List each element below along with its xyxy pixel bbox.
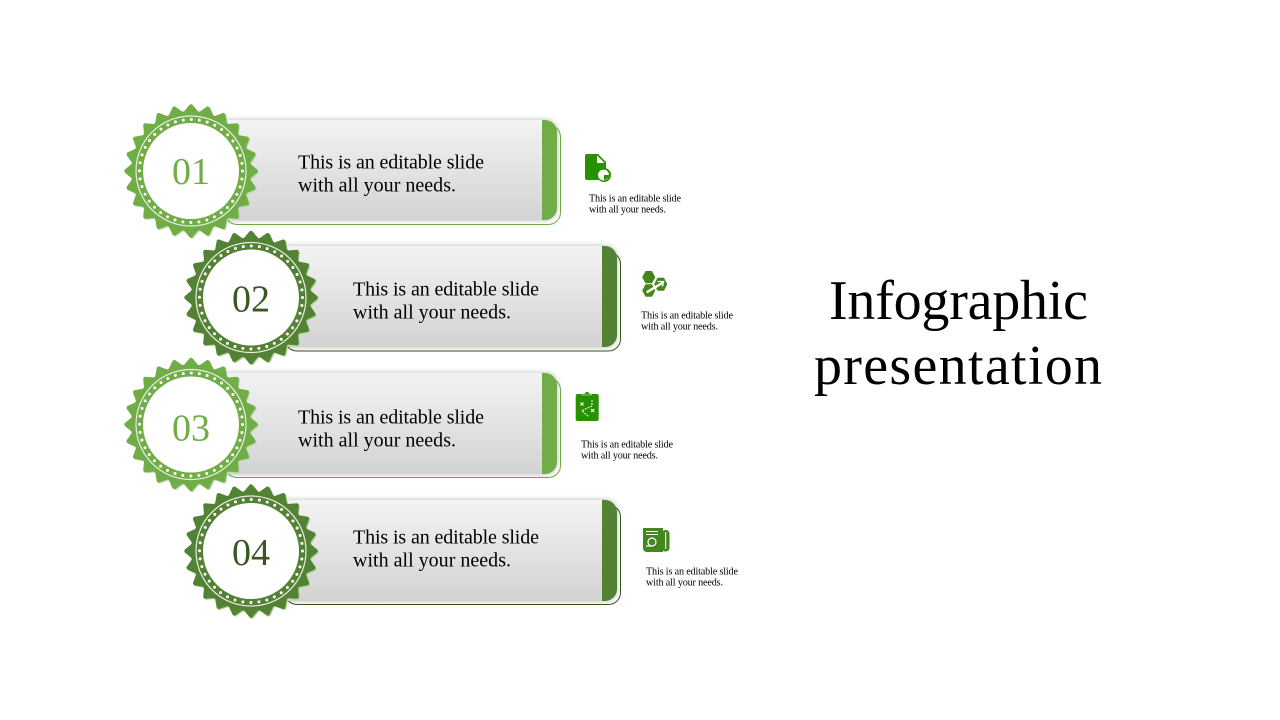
card stripe 01 [542,120,557,220]
note text 2: with all your needs. [641,322,718,332]
card text 01: with all your needs. [298,174,456,196]
panel: step 02 [185,232,620,364]
note text 4: This is an editable slide [646,566,738,578]
badge 01 [125,105,258,238]
note text 3 [581,440,673,462]
note text 1: with all your needs. [589,204,666,216]
card bar 01 [225,120,557,220]
note text 3: with all your needs. [581,450,658,462]
note text 4 [646,566,738,588]
card text 04 [353,526,539,572]
card stripe 03 [542,373,557,474]
card text 04: This is an editable slide [353,526,539,548]
card text 02: with all your needs. [353,302,511,324]
panel: step 03 [125,359,561,491]
card bar 02 [285,246,617,347]
card text 03 [298,406,484,452]
card bar 03 [225,373,557,474]
badge 04 [185,485,318,618]
icon: clipboard with tactics [576,392,599,421]
icon: scroll document [643,528,670,552]
card bar 04 [285,500,617,601]
card outline 01 [225,125,560,224]
note text 2: This is an editable slide [641,310,733,322]
note text 4: with all your needs. [646,578,723,588]
note text 2 [641,310,733,332]
panel: step 01 [125,105,561,238]
badge 02: 02 [232,278,270,320]
card text 01: This is an editable slide [298,152,484,174]
card outline 02 [285,252,620,351]
card text 01 [298,152,484,196]
title: presentation [814,335,1102,397]
note text 3: This is an editable slide [581,440,673,450]
card text 02: This is an editable slide [353,278,539,300]
card text 03: This is an editable slide [298,406,484,428]
badge 02 [185,232,318,364]
badge 01: 01 [172,151,210,193]
card stripe 02 [602,246,617,347]
badge 03 [125,359,258,491]
note text 1 [589,194,681,216]
badge 03: 03 [172,408,210,450]
card outline 04 [285,505,620,604]
card text 03: with all your needs. [298,430,456,452]
card stripe 04 [602,500,617,601]
badge 04: 04 [232,532,270,574]
title [814,270,1102,397]
card outline 03 [225,378,560,478]
card text 04: with all your needs. [353,550,511,572]
card text 02 [353,278,539,324]
icon: document with pie chart [585,154,611,182]
note text 1: This is an editable slide [589,194,681,204]
panel: step 04 [185,485,620,618]
title: Infographic [829,270,1088,332]
icon: linked hexagons [642,271,667,297]
